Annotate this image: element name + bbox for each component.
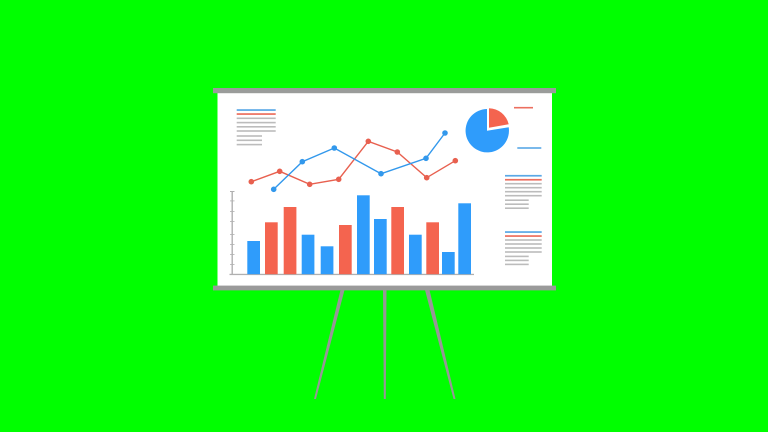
text block: top left — [237, 109, 276, 145]
bottom rail — [213, 286, 556, 290]
easel legs — [314, 290, 456, 399]
pie large slice — [466, 109, 509, 152]
bars — [247, 241, 260, 274]
blue series — [271, 130, 448, 192]
panel: white board — [218, 93, 552, 286]
legend line: blue — [517, 147, 541, 149]
chart axes — [230, 191, 474, 275]
line chart — [248, 130, 458, 192]
bar chart — [230, 191, 474, 275]
red series — [248, 138, 458, 187]
pie chart — [466, 108, 509, 152]
top rail — [213, 88, 556, 93]
text block: right lower — [505, 231, 542, 265]
pie small slice — [489, 108, 509, 128]
text block: right upper — [505, 175, 542, 209]
legend line: red — [514, 107, 533, 108]
